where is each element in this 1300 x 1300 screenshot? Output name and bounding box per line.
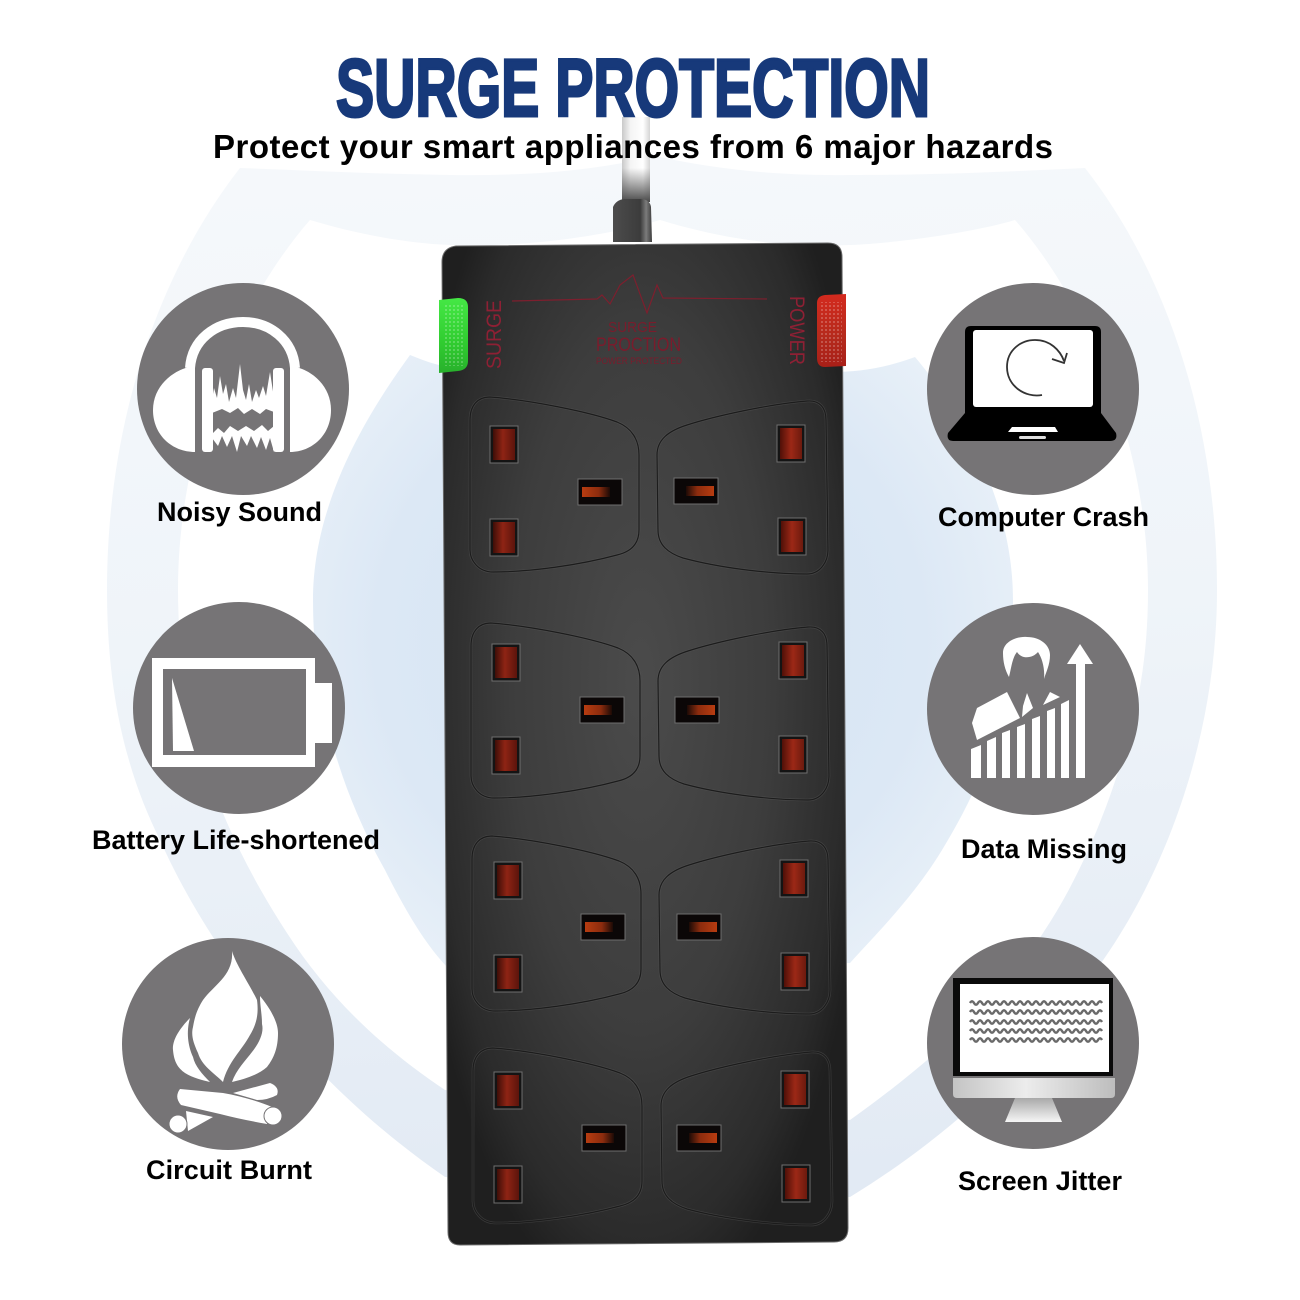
icon: screen jitter monitor [927,937,1139,1149]
socket row 2 left [471,623,640,798]
label: computer crash: Computer Crash [938,502,1149,532]
socket row 4 right [661,1052,832,1225]
label: battery life-shortened: Battery Life-shortened [92,825,380,855]
pulse line [512,275,767,313]
SURGE label: SURGE [483,300,506,369]
surge protection marking: POWER PROTECTED [596,356,682,367]
label: data missing: Data Missing [961,834,1127,864]
socket row 3 left [472,836,641,1011]
power strip [439,243,848,1245]
surge indicator light [439,298,468,373]
power indicator light [817,294,846,367]
label: noisy sound: Noisy Sound [157,497,322,527]
power cable [613,117,652,242]
socket row 3 right [659,841,830,1014]
socket row 1 left [470,397,639,572]
socket row 4 left [473,1048,642,1223]
icon: battery [133,602,345,814]
icon: data missing chart and person [927,603,1139,815]
icon: computer crash laptop [927,283,1139,495]
surge protection marking: SURGE [608,319,657,336]
socket row 1 right [657,401,828,574]
POWER label: POWER [785,296,808,365]
strip body [442,243,848,1245]
socket row 2 right [658,627,829,800]
surge protection marking [596,319,682,367]
icon: noisy sound headphones [137,283,349,495]
surge protection marking: PROCTION [596,335,681,356]
label: screen jitter: Screen Jitter [958,1166,1122,1196]
background shield: white ring [178,220,1148,1120]
title: SURGE PROTECTION [336,43,930,134]
background shield: blue core [313,355,1013,970]
background shield: outer band [107,156,1217,1197]
label: circuit burnt: Circuit Burnt [146,1155,312,1185]
subtitle: Protect your smart appliances from 6 major hazards [213,128,1053,165]
icon: circuit burnt fire [122,938,334,1150]
